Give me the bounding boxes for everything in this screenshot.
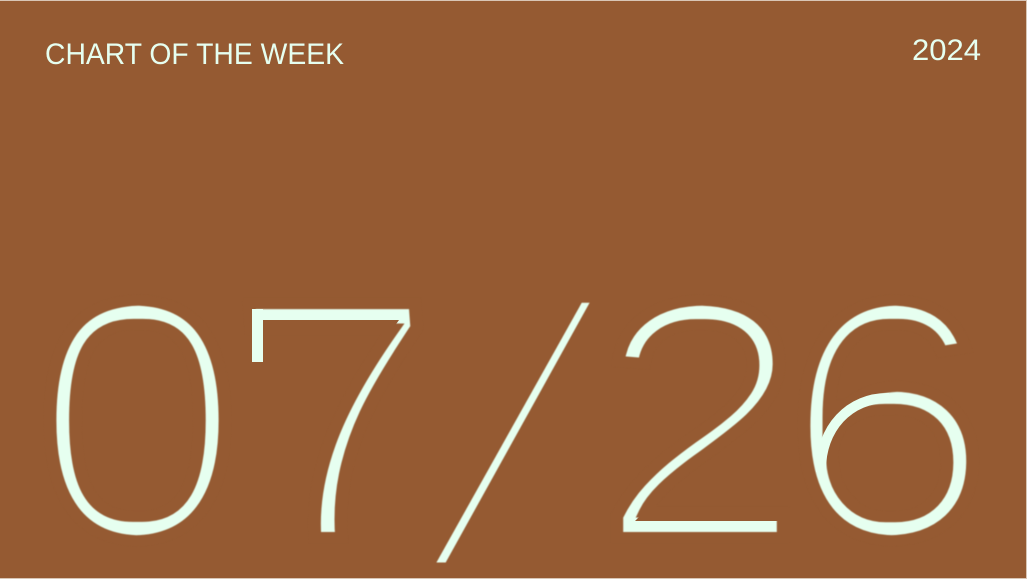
right edge xyxy=(1026,0,1027,579)
digit 7 bar trim xyxy=(263,320,399,327)
digits 0 7 2 6 xyxy=(31,230,994,579)
top edge xyxy=(0,0,1027,1)
digit 2 base trim xyxy=(635,514,785,521)
large date: 07/26 xyxy=(31,230,994,579)
year label: 2024 xyxy=(912,34,981,67)
digit 6 bowl join xyxy=(821,398,889,472)
heading: chart of the week: CHART OF THE WEEK xyxy=(45,38,344,71)
digit 7 top-left flag xyxy=(252,309,263,362)
bottom edge xyxy=(0,578,1027,579)
